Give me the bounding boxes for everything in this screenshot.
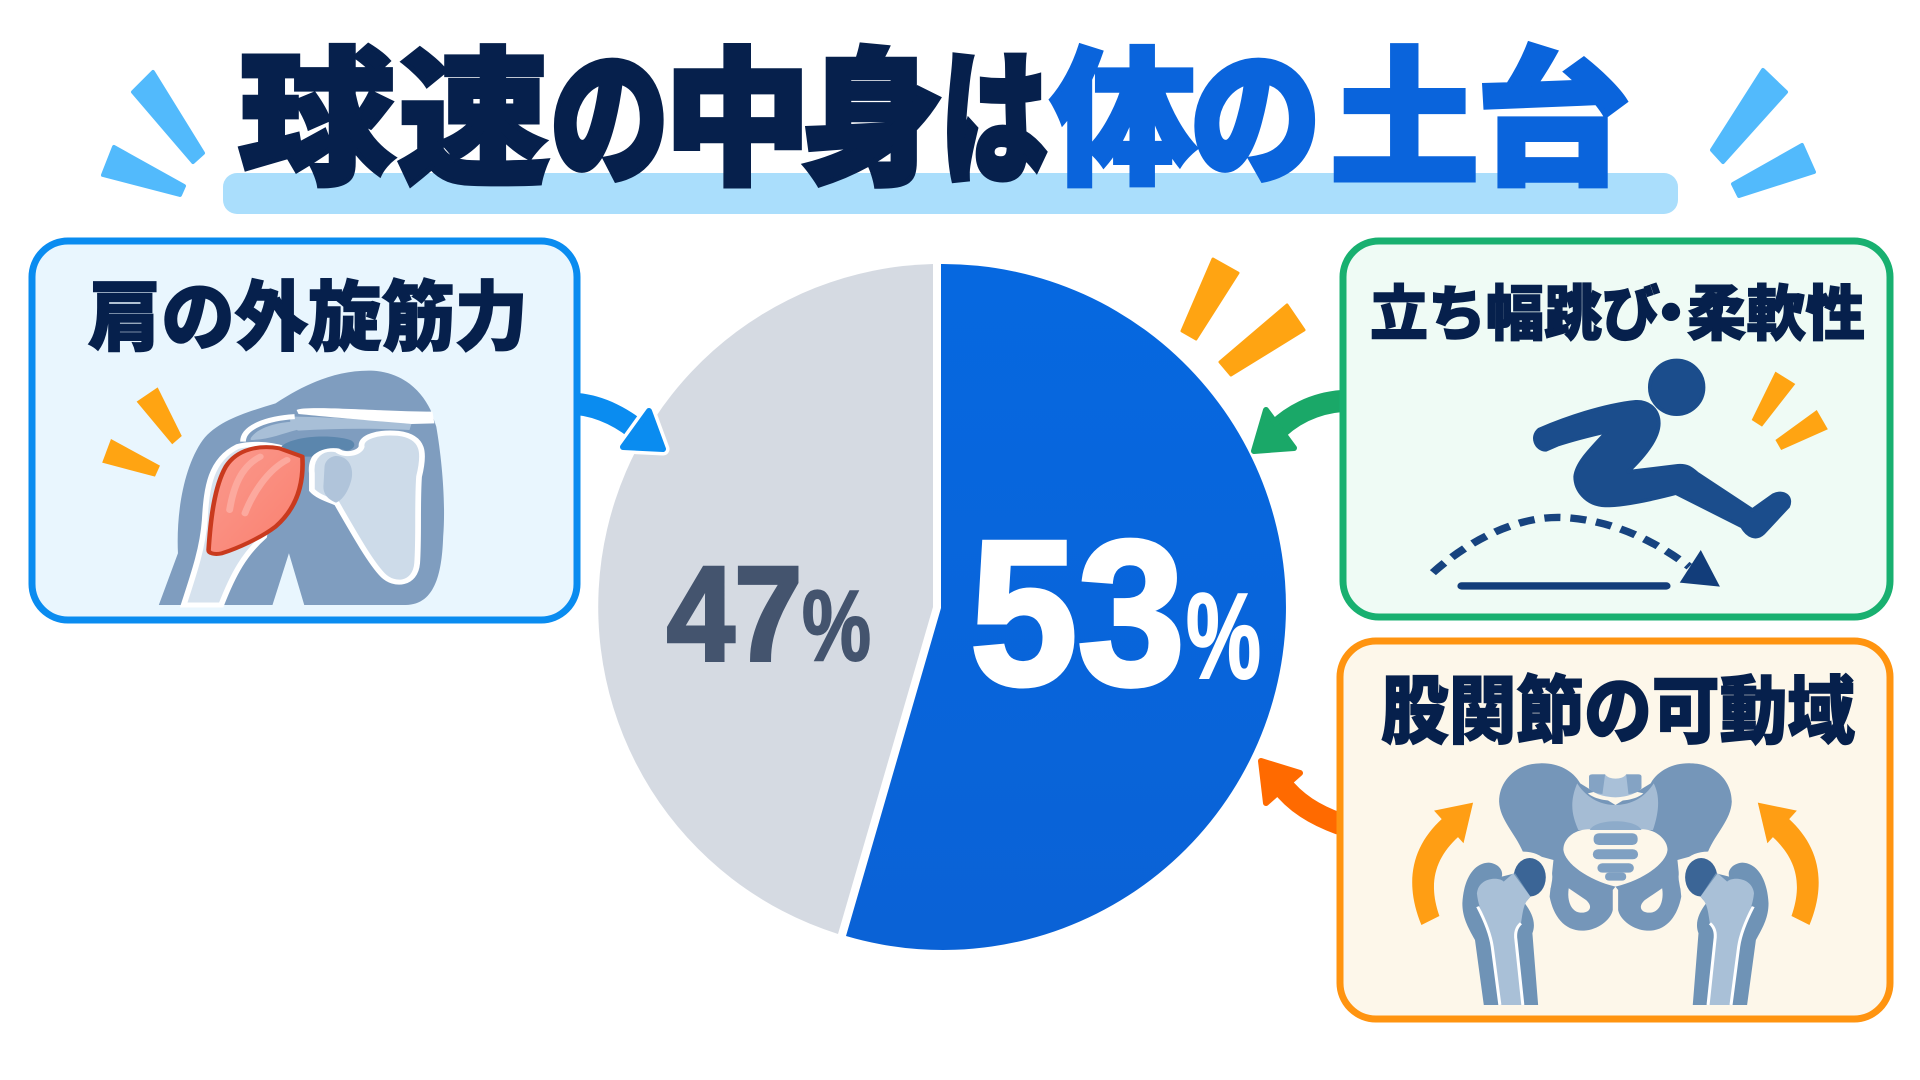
heading: 柔軟性 bbox=[1687, 266, 1865, 353]
title underline bar bbox=[223, 173, 1678, 214]
heading: 股関節の可動域 bbox=[1381, 652, 1855, 759]
panel frame bbox=[1343, 241, 1890, 617]
title: 台 bbox=[1476, 0, 1629, 215]
arrow: green connector bbox=[1254, 401, 1342, 451]
title: 土 bbox=[1330, 0, 1479, 215]
title bbox=[239, 0, 1629, 215]
panel frame bbox=[32, 241, 577, 620]
icon: shoulder anatomy bbox=[159, 371, 444, 605]
heading: 肩の外旋筋力 bbox=[88, 256, 528, 366]
panel: standing long jump and flexibility bbox=[1343, 241, 1890, 617]
title block bbox=[103, 0, 1814, 215]
panel: shoulder external rotation bbox=[32, 241, 577, 620]
panel frame bbox=[1340, 641, 1890, 1019]
title: の bbox=[1190, 0, 1321, 215]
title: 中 bbox=[664, 0, 811, 215]
icon: right rotation arrow bbox=[1758, 803, 1819, 925]
icon: right title burst bbox=[1712, 70, 1814, 196]
title: 身 bbox=[801, 0, 943, 215]
arrow: blue connector bbox=[577, 404, 663, 449]
icon: left rotation arrow bbox=[1412, 803, 1473, 925]
icon: pelvis and femurs bbox=[1462, 763, 1769, 1005]
pie chart bbox=[598, 264, 1286, 950]
title: 速 bbox=[398, 0, 549, 215]
label: 47%: % bbox=[802, 570, 871, 682]
label: 47%: 47 bbox=[667, 540, 802, 689]
title: は bbox=[940, 0, 1048, 215]
title: の bbox=[550, 0, 669, 215]
icon: shoulder sparks bbox=[102, 387, 182, 477]
icon: jump sparks bbox=[1752, 372, 1828, 450]
icon: jump trajectory bbox=[1433, 517, 1720, 587]
arrow: orange connector bbox=[1261, 761, 1340, 824]
heading: ・ bbox=[1641, 266, 1701, 353]
heading: 立ち幅跳び bbox=[1370, 266, 1660, 353]
label: 53%: 53 bbox=[970, 498, 1185, 728]
pie slice: 47% bbox=[598, 264, 933, 934]
title: 球 bbox=[239, 0, 394, 215]
title: 体 bbox=[1051, 0, 1196, 215]
panel: hip range of motion bbox=[1340, 641, 1890, 1019]
icon: left title burst bbox=[103, 72, 203, 195]
icon: jumping figure bbox=[1535, 360, 1789, 537]
heading bbox=[1370, 266, 1865, 353]
icon: pie sparks bbox=[1182, 259, 1304, 375]
pie slice: 53% bbox=[846, 264, 1286, 950]
label: 53%: % bbox=[1186, 568, 1261, 704]
